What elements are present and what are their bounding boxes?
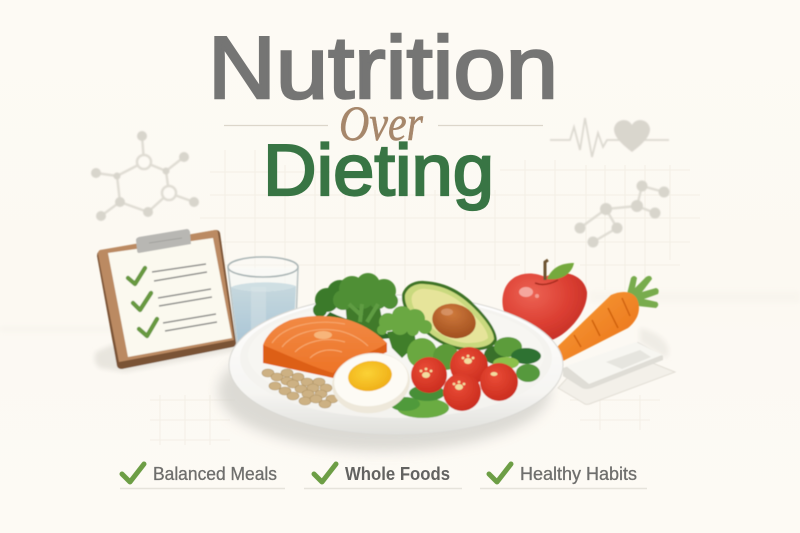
icon: molecule left bbox=[91, 131, 199, 221]
tomatoes bbox=[411, 347, 518, 411]
illustration: food scene bbox=[95, 229, 675, 451]
icon: apple bbox=[502, 260, 587, 343]
clip bbox=[136, 229, 191, 253]
title: Nutrition: Nutrition bbox=[208, 18, 558, 117]
avocado bbox=[402, 281, 497, 351]
divider left bbox=[224, 124, 328, 126]
icon: molecule right bbox=[574, 180, 670, 248]
broccoli front bbox=[377, 306, 432, 358]
title: Over: Over bbox=[339, 95, 423, 151]
benefit: Whole Foods bbox=[304, 464, 462, 488]
background grid bbox=[150, 150, 700, 445]
broccoli back bbox=[300, 273, 398, 345]
checkmarks bbox=[128, 268, 157, 336]
salmon bbox=[263, 316, 387, 378]
icon: heartbeat line and heart bbox=[550, 118, 669, 157]
spinach leaves bbox=[390, 337, 541, 418]
icon: clipboard bbox=[97, 229, 236, 369]
benefit: Healthy Habits: Healthy Habits bbox=[520, 464, 637, 484]
table horizon band bbox=[0, 291, 800, 332]
divider right bbox=[438, 124, 543, 126]
benefit: Whole Foods: Whole Foods bbox=[345, 464, 450, 484]
chickpeas / beans bbox=[262, 369, 338, 408]
plate shadow bbox=[218, 331, 550, 451]
benefit: Balanced Meals bbox=[120, 464, 285, 488]
clipboard shadow bbox=[95, 345, 240, 372]
icon: carrot bbox=[556, 276, 659, 362]
checklist lines bbox=[152, 264, 217, 331]
icon: water glass bbox=[228, 257, 298, 345]
benefit: Balanced Meals: Balanced Meals bbox=[153, 464, 277, 484]
title: Dieting: Dieting bbox=[263, 131, 494, 211]
plate bbox=[229, 295, 563, 435]
napkin and tray bbox=[558, 328, 675, 404]
benefit: Healthy Habits bbox=[480, 464, 647, 488]
egg bbox=[328, 348, 414, 418]
